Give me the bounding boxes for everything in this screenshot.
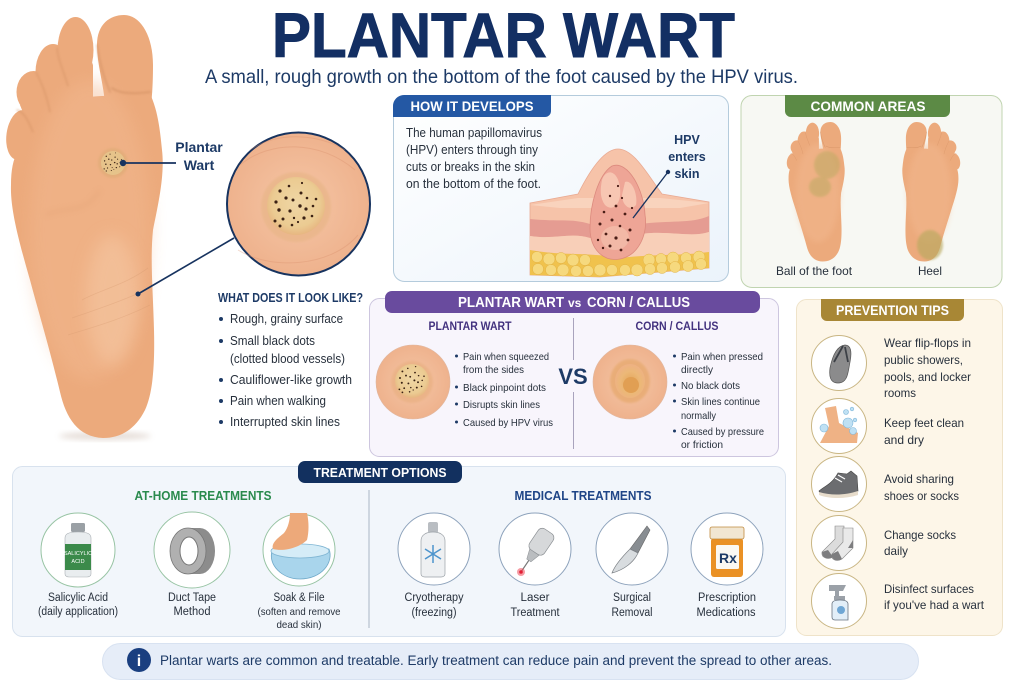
treatment: duct tape <box>154 512 230 618</box>
what does it look like: Rough, grainy surface <box>230 312 343 326</box>
wart on foot <box>98 148 128 178</box>
medical heading: MEDICAL TREATMENTS <box>514 489 652 503</box>
what does it look like: WHAT DOES IT LOOK LIKE? <box>218 291 363 305</box>
column: corn callus: Caused by pressure <box>681 426 764 438</box>
column: corn callus: Skin lines continue <box>681 396 760 408</box>
tip: flip-flops: pools, and locker <box>884 370 971 384</box>
foot: heel: Heel <box>918 264 942 278</box>
label: hpv enters skin: enters <box>668 150 706 164</box>
at-home heading: AT-HOME TREATMENTS <box>134 489 272 503</box>
tip: clean feet <box>812 398 964 454</box>
what does it look like: (clotted blood vessels) <box>230 352 345 366</box>
column: plantar wart: Black pinpoint dots <box>463 382 546 394</box>
title: PLANTAR WART <box>272 1 735 71</box>
tip: flip-flops: Wear flip-flops in <box>884 336 971 350</box>
treatment: cryotherapy <box>398 513 470 619</box>
panel: comparison <box>370 291 778 456</box>
column: corn callus: Pain when pressed <box>681 351 763 363</box>
subtitle: A small, rough growth on the bottom of the foot caused by the HPV virus. <box>205 66 798 88</box>
magnified wart <box>227 132 370 276</box>
label: plantar wart: Plantar <box>175 139 223 155</box>
tip: socks: Change socks <box>884 528 956 542</box>
label: hpv enters skin <box>668 133 706 181</box>
treatment: salicylic acid <box>38 513 118 618</box>
treatment: salicylic acid: Salicylic Acid <box>48 592 108 604</box>
treatment: surgical: Removal <box>612 607 652 619</box>
panel: prevention tips <box>796 299 1002 636</box>
label: hpv enters skin: HPV <box>674 133 701 147</box>
vs badge: VS <box>558 364 588 389</box>
what does it look like: Cauliflower-like growth <box>230 373 352 387</box>
column: plantar wart: Disrupts skin lines <box>463 399 540 411</box>
column: corn callus: or friction <box>681 439 723 451</box>
foot: heel <box>902 122 961 278</box>
tip: socks <box>812 516 956 570</box>
column: plantar wart: from the sides <box>463 364 524 376</box>
leader: plantar wart <box>120 160 176 166</box>
treatment: prescription: Rx <box>719 550 737 566</box>
treatment: soak and file: dead skin) <box>276 619 322 631</box>
tip: shoes: shoes or socks <box>884 489 959 503</box>
treatment: prescription: Medications <box>696 607 756 619</box>
foot illustration <box>3 15 163 440</box>
column: corn callus: CORN / CALLUS <box>636 321 719 333</box>
heading tab <box>393 95 551 117</box>
column: corn callus: No black dots <box>681 380 740 392</box>
column: plantar wart: Caused by HPV virus <box>463 417 553 429</box>
heading tab: HOW IT DEVELOPS <box>410 98 534 114</box>
treatment: soak and file: Soak & File <box>274 592 324 604</box>
description: (HPV) enters through tiny <box>406 143 539 157</box>
column: plantar wart: Pain when squeezed <box>463 351 549 363</box>
treatment: cryotherapy: Cryotherapy <box>404 592 464 604</box>
treatment: soak and file <box>258 513 341 631</box>
what does it look like: Small black dots <box>230 334 315 348</box>
what does it look like: Pain when walking <box>230 394 326 408</box>
treatment: laser: Treatment <box>510 607 560 619</box>
skin cross-section <box>530 149 709 277</box>
treatment: surgical: Surgical <box>613 592 651 604</box>
heading tab <box>821 299 964 321</box>
divider <box>572 318 574 449</box>
treatment: laser: Laser <box>520 592 550 604</box>
heading tab <box>298 461 462 483</box>
what does it look like: Interrupted skin lines <box>230 415 340 429</box>
treatment: salicylic acid: (daily application) <box>38 606 118 618</box>
tip: clean feet: and dry <box>884 433 924 447</box>
heading tab: COMMON AREAS <box>810 98 926 114</box>
column: corn callus: normally <box>681 410 717 422</box>
panel: treatment options <box>12 461 786 636</box>
treatment: salicylic acid: SALICYLIC <box>64 551 92 557</box>
column: plantar wart <box>376 321 553 429</box>
tip: shoes <box>812 456 959 512</box>
panel: how it develops <box>393 95 728 282</box>
treatment: prescription: Prescription <box>698 592 756 604</box>
comparison header <box>385 291 760 313</box>
treatment: cryotherapy: (freezing) <box>412 607 457 619</box>
leader: magnifier <box>136 238 234 296</box>
treatment: soak and file: (soften and remove <box>258 606 341 618</box>
description: cuts or breaks in the skin <box>406 160 535 174</box>
comparison header: vs <box>568 296 582 310</box>
description: on the bottom of the foot. <box>406 177 541 191</box>
heading tab: PREVENTION TIPS <box>836 302 949 318</box>
column: corn callus <box>593 321 764 451</box>
pointer: hpv enters skin <box>633 170 670 218</box>
tip: flip-flops: public showers, <box>884 353 963 367</box>
panel: common areas <box>741 95 1002 288</box>
description <box>406 126 542 191</box>
treatment: duct tape: Method <box>174 606 210 618</box>
tip: disinfect: if you've had a wart <box>884 598 985 612</box>
tip: disinfect: Disinfect surfaces <box>884 582 974 596</box>
tip: clean feet: Keep feet clean <box>884 416 964 430</box>
label: plantar wart <box>175 139 223 173</box>
treatment: salicylic acid: ACID <box>71 559 85 565</box>
column: corn callus: directly <box>681 364 714 376</box>
footer callout: Plantar warts are common and treatable. Early treatment can reduce pain and prevent the spread to other areas. <box>160 653 832 668</box>
tip: flip-flops: rooms <box>884 386 916 400</box>
treatment: surgical <box>596 513 668 619</box>
tip: flip-flops <box>812 336 971 400</box>
treatment: prescription <box>691 513 763 619</box>
heading tab: TREATMENT OPTIONS <box>314 465 447 480</box>
icon: info <box>127 648 151 672</box>
description: The human papillomavirus <box>406 126 542 140</box>
tip: shoes: Avoid sharing <box>884 472 954 486</box>
tip: disinfect <box>812 574 985 628</box>
treatment: laser <box>499 513 571 619</box>
footer callout <box>102 644 918 680</box>
foot: ball of the foot: Ball of the foot <box>776 264 853 278</box>
label: plantar wart: Wart <box>184 157 215 173</box>
comparison header: CORN / CALLUS <box>587 295 690 311</box>
tip: socks: daily <box>884 544 908 558</box>
treatment: duct tape: Duct Tape <box>168 592 216 604</box>
comparison header: PLANTAR WART <box>458 295 564 311</box>
what does it look like <box>218 291 363 429</box>
foot: ball of the foot <box>776 122 853 278</box>
column: plantar wart: PLANTAR WART <box>428 321 512 333</box>
icon: info: i <box>137 653 141 670</box>
label: hpv enters skin: skin <box>674 167 700 181</box>
heading tab <box>785 95 950 117</box>
